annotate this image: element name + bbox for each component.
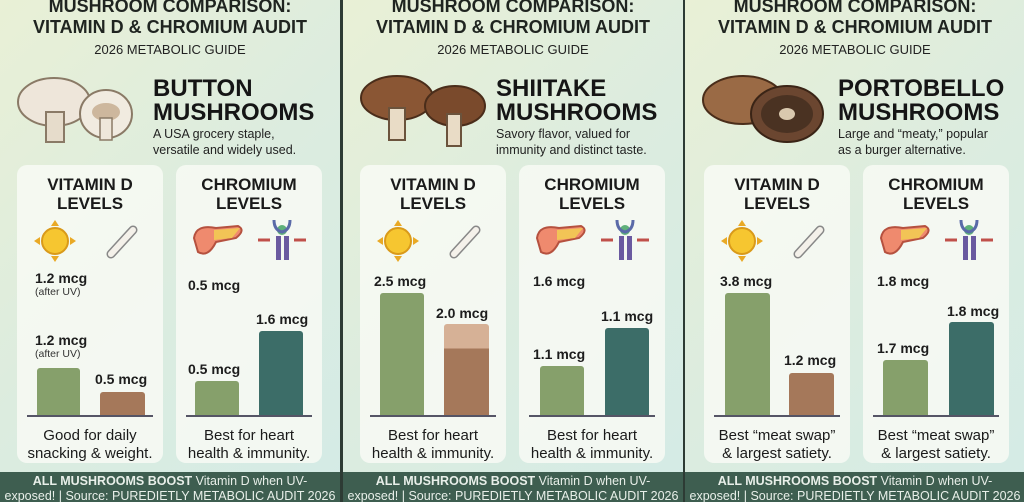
title: [33, 0, 307, 37]
icon: sun and bone: [377, 220, 480, 262]
panel: portobello mushrooms: [685, 0, 1024, 502]
card: chromium: 0.5 mcg: [188, 277, 240, 293]
name: [838, 75, 1004, 126]
description: [496, 127, 647, 157]
card: vitamin D: 1.2 mcg: [35, 270, 87, 286]
card: vitamin D: 2.0 mcg: [436, 305, 488, 321]
name: PORTOBELLO: [838, 75, 1004, 102]
card: chromium: LEVELS: [216, 194, 282, 213]
card: vitamin D: 1.2 mcg: [784, 352, 836, 368]
card: vitamin D: (after UV): [35, 286, 81, 298]
card: chromium: health & immunity.: [531, 445, 653, 462]
icon: sun and bone: [721, 220, 824, 262]
card: vitamin D: VITAMIN D: [734, 175, 820, 194]
card: chromium: LEVELS: [559, 194, 625, 213]
footer: ALL MUSHROOMS BOOST Vitamin D when UV-: [33, 474, 307, 488]
card: chromium: Best “meat swap”: [878, 427, 994, 444]
footer: ALL MUSHROOMS BOOST Vitamin D when UV-: [376, 474, 650, 488]
card: vitamin D: 0.5 mcg: [95, 371, 147, 387]
title: [718, 0, 992, 37]
description: Savory flavor, valued for: [496, 127, 630, 141]
card: vitamin D: Best “meat swap”: [719, 427, 835, 444]
card: vitamin D: VITAMIN D: [47, 175, 133, 194]
card: chromium: 1.6 mcg: [533, 273, 585, 289]
panel: button mushrooms: [0, 0, 340, 502]
name: [153, 75, 314, 126]
description: as a burger alternative.: [838, 143, 966, 157]
card: chromium: 1.1 mcg: [533, 346, 585, 362]
card: chromium: CHROMIUM: [544, 175, 640, 194]
card: vitamin D: snacking & weight.: [27, 445, 153, 462]
card: chromium: 1.8 mcg: [877, 273, 929, 289]
footer: [0, 472, 340, 502]
card: vitamin D: LEVELS: [57, 194, 123, 213]
title: [376, 0, 650, 37]
description: [838, 127, 988, 157]
card: chromium: Best for heart: [204, 427, 294, 444]
card: chromium: CHROMIUM: [201, 175, 297, 194]
title: VITAMIN D & CHROMIUM AUDIT: [718, 17, 992, 37]
card: vitamin D: [704, 165, 850, 463]
icon: pancreas and receptor: [193, 220, 306, 260]
name: SHIITAKE: [496, 75, 606, 102]
title: VITAMIN D & CHROMIUM AUDIT: [33, 17, 307, 37]
card: chromium: 1.1 mcg: [601, 308, 653, 324]
panel: shiitake mushrooms: [343, 0, 683, 502]
card: chromium: 1.7 mcg: [877, 340, 929, 356]
card: chromium: [176, 165, 322, 463]
card: chromium: health & immunity.: [188, 445, 310, 462]
icon: sun and bone: [34, 220, 138, 262]
subtitle: 2026 METABOLIC GUIDE: [94, 42, 246, 57]
name: [496, 75, 657, 126]
card: chromium: 1.8 mcg: [947, 303, 999, 319]
description: immunity and distinct taste.: [496, 143, 647, 157]
card: vitamin D: health & immunity.: [372, 445, 494, 462]
name: MUSHROOMS: [496, 99, 657, 126]
card: vitamin D: Best for heart: [388, 427, 478, 444]
illustration: portobello: [702, 75, 824, 143]
card: chromium: [863, 165, 1009, 463]
card: vitamin D: LEVELS: [744, 194, 810, 213]
name: MUSHROOMS: [838, 99, 999, 126]
subtitle: 2026 METABOLIC GUIDE: [779, 42, 931, 57]
title: VITAMIN D & CHROMIUM AUDIT: [376, 17, 650, 37]
illustration: button mushrooms: [17, 77, 133, 143]
name: MUSHROOMS: [153, 99, 314, 126]
card: chromium: LEVELS: [903, 194, 969, 213]
icon: pancreas and receptor: [536, 220, 649, 260]
footer: [343, 472, 683, 502]
footer: [685, 472, 1024, 502]
card: vitamin D: [360, 165, 506, 463]
card: vitamin D: 3.8 mcg: [720, 273, 772, 289]
card: vitamin D: [17, 165, 163, 463]
card: chromium: 0.5 mcg: [188, 361, 240, 377]
card: vitamin D: (after UV): [35, 348, 81, 360]
card: vitamin D: & largest satiety.: [722, 445, 832, 462]
card: chromium: Best for heart: [547, 427, 637, 444]
name: BUTTON: [153, 75, 253, 102]
card: chromium: 1.6 mcg: [256, 311, 308, 327]
description: [153, 127, 296, 157]
card: vitamin D: 1.2 mcg: [35, 332, 87, 348]
card: chromium: [519, 165, 665, 463]
card: chromium: CHROMIUM: [888, 175, 984, 194]
card: vitamin D: VITAMIN D: [390, 175, 476, 194]
illustration: shiitake: [360, 75, 486, 147]
subtitle: 2026 METABOLIC GUIDE: [437, 42, 589, 57]
card: chromium: & largest satiety.: [881, 445, 991, 462]
card: vitamin D: Good for daily: [43, 427, 137, 444]
card: vitamin D: LEVELS: [400, 194, 466, 213]
description: A USA grocery staple,: [153, 127, 275, 141]
footer: ALL MUSHROOMS BOOST Vitamin D when UV-: [718, 474, 992, 488]
icon: pancreas and receptor: [880, 220, 993, 260]
card: vitamin D: 2.5 mcg: [374, 273, 426, 289]
description: Large and “meaty,” popular: [838, 127, 988, 141]
description: versatile and widely used.: [153, 143, 296, 157]
